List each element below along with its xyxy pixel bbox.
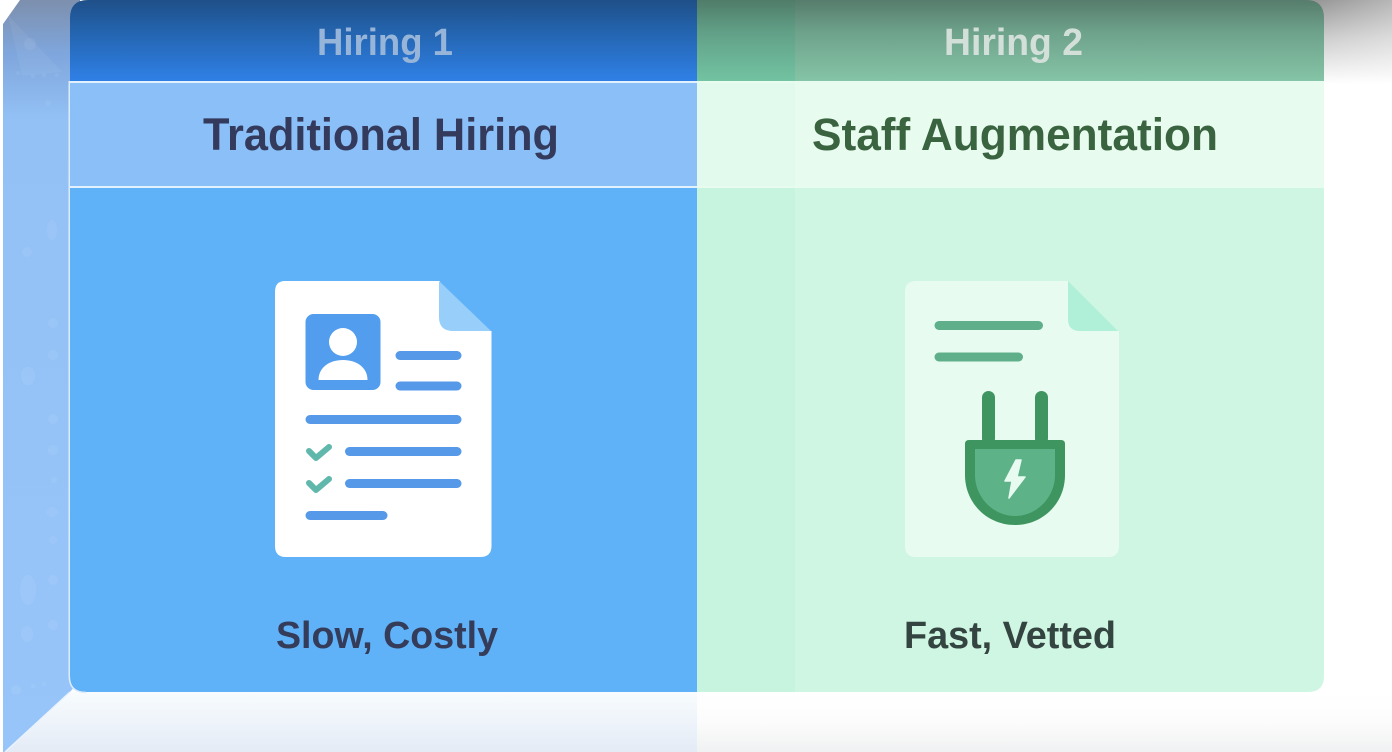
icon: power plug [965,391,1065,525]
icon: resume document [275,281,492,557]
document text lines [934,321,1043,362]
left wall: blue perspective side panel [3,0,80,752]
background: top right shade [1300,0,1392,84]
icon: lightning bolt [1005,460,1025,498]
caption: Fast, Vetted: Fast, Vetted [904,615,1116,657]
subheader: Staff Augmentation: Staff Augmentation [812,109,1218,160]
column header: Hiring 1 [70,0,697,81]
resume text lines [306,351,462,520]
column header: Hiring 2 [697,0,1324,81]
body panel: green [697,188,1324,692]
panel: traditional hiring column [69,0,697,692]
panel: staff augmentation column [697,0,1324,692]
subheader: Traditional Hiring: Traditional Hiring [203,109,559,160]
subheader: Staff Augmentation [697,81,1324,188]
column header: Hiring 1: Hiring 1 [317,22,453,64]
column header: Hiring 2: Hiring 2 [944,22,1083,64]
icon: profile photo [306,314,380,390]
icon: plug document [905,281,1119,557]
floor: bottom perspective plane [4,692,1392,752]
icon: check marks [309,447,329,490]
subheader: Traditional Hiring [70,83,697,186]
caption: Slow, Costly: Slow, Costly [276,615,498,657]
body panel: blue [70,188,697,692]
